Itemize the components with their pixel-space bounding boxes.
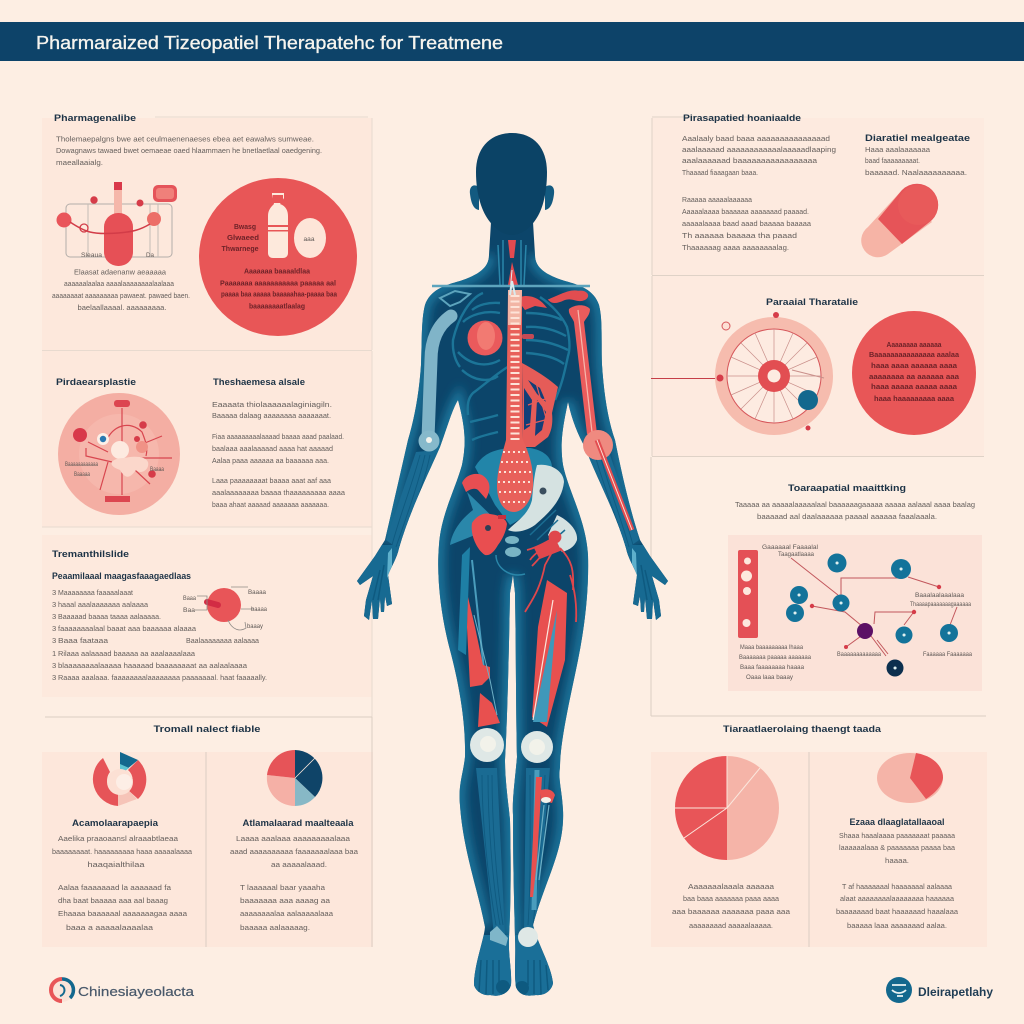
text column: Aaaaalaaaa baaaaaa aaaaaaad paaaad. — [682, 207, 809, 216]
neck vessels — [498, 240, 526, 292]
heading: Tiaraatlaerolaing thaengt taada — [723, 724, 882, 735]
callout circle: drug chemistry: Glwaeed — [227, 233, 260, 242]
text column: Eaaaata thiolaaaaaalaginiagiln. — [212, 400, 332, 409]
numbered list: faaaaaaaalaal baaat aaa baaaaaa alaaaa — [58, 624, 197, 633]
text column: aaalaaaaad aaaaaaaaaaaalaaaaadlaaping — [682, 145, 836, 154]
numbered list: blaaaaaaaalaaaaa haaaaad baaaaaaaat aa aalaalaaaa — [58, 661, 248, 670]
panel: treatment bonding chart — [651, 457, 987, 947]
column: left text: haaqaialthilaa — [88, 860, 145, 869]
diagram: red target circle: Baaaa — [248, 590, 267, 596]
numbered list: Baaaaad baaaa taaaa aalaaaaa. — [58, 612, 161, 621]
network diagram: Gaaaaaal Faaaalal — [762, 545, 818, 551]
spine and stomach — [497, 281, 533, 512]
column: left text — [52, 818, 193, 932]
panel: peptide monotherapy — [652, 113, 984, 276]
title banner — [0, 22, 1024, 61]
subheading: Peaamilaaal maagasfaaagaedlaas — [52, 571, 191, 582]
heading: pharmagenalibe: Pharmagenalibe — [54, 113, 136, 124]
numbered list: Baaa faataaa — [58, 636, 109, 645]
callout circle: drug chemistry: aaa — [304, 237, 315, 243]
numbered list: Rilaaa aalaaaad baaaaa aa aaalaaaalaaa — [58, 649, 196, 658]
column: left text — [672, 882, 791, 930]
intro text — [56, 134, 322, 167]
text column: baaa ahaat aaaaad aaaaaaa aaaaaaa. — [212, 500, 329, 509]
side heading and text: Haaa aaalaaaaaaa — [865, 145, 931, 154]
intro text: maeallaaialg. — [56, 158, 103, 167]
side heading and text — [865, 133, 970, 177]
column: right text — [230, 818, 359, 932]
text column: Laaa paaaaaaaat baaaa aaat aaf aaa — [212, 476, 332, 485]
numbered list: 3 — [52, 636, 56, 645]
side heading and text: Diaratiel mealgeatae — [865, 133, 970, 144]
callout circle: haaa aaaa aaaaaa aaaa — [871, 361, 958, 370]
wheel diagram — [715, 312, 833, 435]
network diagram: Maaa baaaaaaaaa lhaaa — [740, 645, 804, 651]
heading: left: Pirdaearsplastie — [56, 377, 136, 388]
text column: aaalaaaaaad baaaaaaaaaaaaaaaaa — [682, 156, 818, 165]
footer logo: right: Dleirapetlahy — [918, 987, 994, 999]
fine bands — [392, 455, 633, 925]
panel: treatment guide — [42, 527, 372, 717]
numbered list: 3 — [52, 661, 56, 670]
panel: trial select table — [42, 717, 373, 947]
upper arm: right — [550, 292, 632, 530]
column: left text: Aalaa faaaaaaad la aaaaaad fa — [58, 883, 172, 892]
text column — [682, 134, 836, 252]
diagram: red target circle — [183, 587, 268, 645]
intro text: Tholemaepalgns bwe aet ceulmaenenaeses ebea aet eawalws sumweae. — [56, 134, 314, 144]
callout circle: Baaaaaaaaaaaaaaa aaalaa — [869, 350, 960, 359]
toe and finger lines — [373, 565, 652, 994]
callout circle: Aaaaaaaa aaaaaa — [886, 340, 942, 349]
column: right text: haaaa. — [885, 856, 909, 865]
column: left text: Acamolaarapaepia — [72, 818, 159, 829]
text column: Raaaaa aaaaalaaaaaa — [682, 195, 753, 204]
panel: pharmacoplastic — [42, 351, 372, 527]
upper arm bone: left — [418, 316, 451, 452]
network diagram: Thaaaapaaaaaaagaaaaaa — [910, 602, 972, 608]
callout circle: drug chemistry: Thwarnege — [222, 244, 258, 253]
column: right text: Ezaaa dlaaglatallaaoal — [850, 817, 944, 828]
caption under diagram — [52, 268, 190, 312]
text column: aaaaalaaaa baad aaad baaaaa baaaaa — [682, 219, 812, 228]
donut chart — [93, 752, 146, 806]
network diagram — [728, 535, 982, 691]
feet — [474, 935, 553, 996]
diagram: red target circle: Baaa — [183, 596, 197, 602]
intro text — [735, 500, 975, 521]
numbered list: 3 — [52, 673, 56, 682]
text column: Baaaaa dalaag aaaaaaaa aaaaaaat. — [212, 411, 331, 420]
text column: Fiaa aaaaaaaaalaaaad baaaa aaad paalaad. — [212, 432, 344, 441]
large pie chart — [675, 756, 779, 860]
diagram: bottle with circuit — [56, 182, 177, 266]
diagram: red target circle: Baa — [183, 608, 196, 614]
column: right text: baaaaa aalaaaaag. — [240, 923, 310, 932]
vessels: pelvis bundle — [525, 532, 576, 622]
caption under diagram: baelaallaaaal. aaaaaaaaa. — [78, 303, 166, 312]
circular cell diagram: Baaaa — [150, 467, 165, 473]
footer logo: left — [50, 978, 195, 1002]
numbered list: Raaaa aaalaaa. faaaaaaaalaaaaaaaa paaaaaaal. haat faaaaally. — [58, 673, 267, 682]
network diagram: Taagaatlaaaa — [778, 552, 815, 558]
callout circle: drug chemistry: paaaa baa aaaaa baaaaahaa-paaaa baa — [221, 290, 338, 298]
numbered list: 3 — [52, 624, 56, 633]
heading: treatment: Tremanthilslide — [52, 549, 129, 560]
column: right text: baaaaaaad baat haaaaaad haaalaaa — [836, 907, 959, 916]
network diagram: Faaaaaa Faaaaaaa — [923, 652, 973, 658]
column: right text: baaaaaaa aaa aaaag aa — [240, 896, 331, 905]
callout circle: aaaaaaaa aa aaaaaa aaa — [869, 372, 960, 381]
side heading and text: baad faaaaaaaaat. — [865, 156, 920, 165]
network diagram: Baaalaalaaalaaa — [915, 593, 965, 599]
column: right text: T af haaaaaaal haaaaaaal aalaaaa — [842, 882, 953, 891]
column: left text: baa baaa aaaaaaa paaa aaaa — [683, 894, 780, 903]
panel: therapeutic monitoring — [728, 483, 982, 691]
text column — [212, 400, 346, 509]
icon: capsule — [861, 184, 938, 257]
figure: human body anatomy — [357, 133, 668, 996]
heading: Paraaial Tharatalie — [766, 297, 858, 308]
head — [476, 133, 547, 235]
text column: Thaaaaaag aaaa aaaaaaaalag. — [682, 243, 789, 252]
edge glow — [385, 255, 640, 937]
callout circle: drug chemistry: baaaaaaaatlaalag — [249, 302, 305, 310]
numbered list — [52, 588, 267, 682]
callout circle — [852, 311, 976, 435]
footer logo: right — [886, 977, 994, 1003]
numbered list: haaal aaalaaaaaaa aalaaaa — [58, 600, 149, 609]
column: left text: Aaelika praaoaansl alraaabtlaeaa — [58, 834, 179, 843]
lower leg bands — [476, 768, 550, 935]
title banner: Pharmaraized Tizeopatiel Therapatehc for Treatmene — [36, 33, 503, 53]
numbered list: Maaaaaaaa faaaaalaaat — [58, 588, 134, 597]
network diagram: Baaa faaaaaaaa haaaa — [740, 665, 805, 671]
text column: Thaaaad fiaaagaan baaa. — [682, 168, 758, 177]
callout circle: haaa haaaaaaaaa aaaa — [874, 394, 955, 403]
pie chart — [267, 750, 322, 806]
panel: pharmacogenomics — [42, 113, 372, 350]
network diagram: Baaaaaaa paaaaa aaaaaaa — [739, 655, 812, 661]
abdomen organs — [450, 448, 577, 575]
column: left text: aaaaaaaad aaaaalaaaaa. — [689, 921, 773, 930]
column: right text: laaaaaalaaa & paaaaaaa paaaa baa — [839, 843, 956, 852]
column: left text: Ehaaaa baaaaaal aaaaaaagaa aaaa — [58, 909, 188, 918]
caption under diagram: aaaaaalaalaa aaaalaaaaaaaalaalaaa — [64, 279, 175, 288]
column: right text: aa aaaaalaaad. — [271, 860, 327, 869]
diagram: red target circle: baaaa — [251, 607, 268, 613]
organ: heart circle — [468, 320, 502, 356]
caption under diagram: aaaaaaaat aaaaaaaaa pawaeat. pawaed baen. — [52, 291, 190, 300]
heading: right: Theshaemesa alsale — [213, 377, 305, 388]
column: right text: Shaaa haaalaaaa paaaaaaat paaaaa — [839, 831, 956, 840]
footer logo: left: Chinesiayeolacta — [78, 984, 195, 999]
column: right text: alaat aaaaaaaalaaaaaaaa haaaaaa — [840, 894, 955, 903]
intro text: Dowagnaws tawaed bwet oemaeae oaed hlaammaen he bnetlaetlaal oaedgening. — [56, 146, 322, 155]
lung vessel network — [520, 296, 558, 447]
circular cell diagram — [58, 393, 180, 515]
numbered list: 3 — [52, 612, 56, 621]
text column: Th aaaaaa baaaaa tha paaad — [682, 231, 797, 240]
heading: Toaraapatial maaittking — [788, 483, 906, 494]
diagram: red target circle: Baalaaaaaaaa aalaaaa — [186, 636, 260, 645]
column: right text: T laaaaaal baar yaaaha — [240, 883, 326, 892]
heading: trial table: Tromall nalect fiable — [154, 724, 260, 735]
column: left text: baaa a aaaaalaaaalaa — [66, 923, 154, 932]
hands — [357, 545, 668, 620]
callout circle: haaa aaaaa aaaaa aaaa — [871, 382, 958, 391]
heading: Pirasapatied hoaniaalde — [683, 113, 801, 124]
hand highlights — [387, 548, 392, 578]
text column: aaalaaaaaaaa baaaa thaaaaaaaaa aaaa — [212, 488, 346, 497]
arrow into wheel — [651, 378, 718, 380]
column: right text — [836, 817, 959, 930]
forearm bands: right — [595, 454, 639, 549]
column: left text: Aaaaaaalaaala aaaaaa — [688, 882, 775, 891]
side heading and text: baaaaad. Naalaaaaaaaaaa. — [865, 168, 967, 177]
circular cell diagram: Baaaaa — [74, 472, 91, 478]
intro text: baaaaad aal daalaaaaaa paaaal aaaaaa faaalaaala. — [757, 512, 937, 521]
numbered list: 3 — [52, 588, 56, 597]
numbered list: 3 — [52, 600, 56, 609]
callout circle: drug chemistry: Paaaaaaa aaaaaaaaaaa paaaaa aal — [220, 278, 336, 288]
column: right text: aaad aaaaaaaaaa faaaaaaalaaa baa — [230, 847, 359, 856]
shoulder blade — [440, 291, 470, 306]
text column: Aaalaaly baad baaa aaaaaaaaaaaaaaad — [682, 134, 830, 143]
callout circle: drug chemistry — [199, 178, 357, 336]
ears — [470, 185, 554, 210]
column: right text: Laaaa aaalaaa aaaaaaaaalaaa — [236, 834, 351, 843]
network diagram: Baaaaaaaaaaaaa — [837, 652, 882, 658]
ribcage and clavicles — [432, 286, 590, 440]
intro text: Taaaaa aa aaaaalaaaaalaal baaaaaagaaaaa aaaaa aalaaal aaaa baalag — [735, 500, 975, 509]
text column: baalaaa aaalaaaaad aaaa hat aaaaad — [212, 444, 333, 453]
column: left text: dha baat baaaaa aaa aal baaag — [58, 896, 168, 905]
panel: personal therapeutic — [651, 276, 984, 456]
small pie chart — [877, 753, 943, 803]
diagram: bottle with circuit: Sleaua — [81, 253, 103, 259]
column: right text: baaaaa laaa aaaaaaad aalaa. — [847, 921, 947, 930]
column: left text: aaa baaaaaa aaaaaaa paaa aaa — [672, 907, 791, 916]
leg vessels and bones: left — [458, 547, 508, 946]
diagram: bottle with circuit: Da — [146, 253, 155, 259]
column: right text: aaaaaaaalaa aalaaaaalaaa — [240, 909, 334, 918]
network diagram: Oaaa laaa baaay — [746, 675, 793, 681]
circular cell diagram: Baaaaaaaaaaaa — [65, 462, 98, 468]
callout circle: drug chemistry: Bwasg — [234, 222, 256, 231]
body silhouette — [357, 223, 668, 996]
forearm bands: left — [386, 450, 436, 550]
numbered list: 1 — [52, 649, 56, 658]
caption under diagram: Elaasat adaenanw aeaaaaa — [74, 268, 167, 276]
leg vessels and bones: right — [518, 580, 567, 947]
diagram: red target circle: baaay — [247, 624, 263, 630]
text column: Aalaa paaa aaaaaa aa baaaaaa aaa. — [212, 456, 329, 465]
callout circle: drug chemistry: Aaaaaaa baaaaldlaa — [244, 266, 311, 276]
column: left text: baaaaaaaat. haaaaaaaaa haaa aaaaalaaaa — [52, 847, 193, 856]
column: right text: Atlamalaarad maalteaala — [242, 818, 354, 829]
